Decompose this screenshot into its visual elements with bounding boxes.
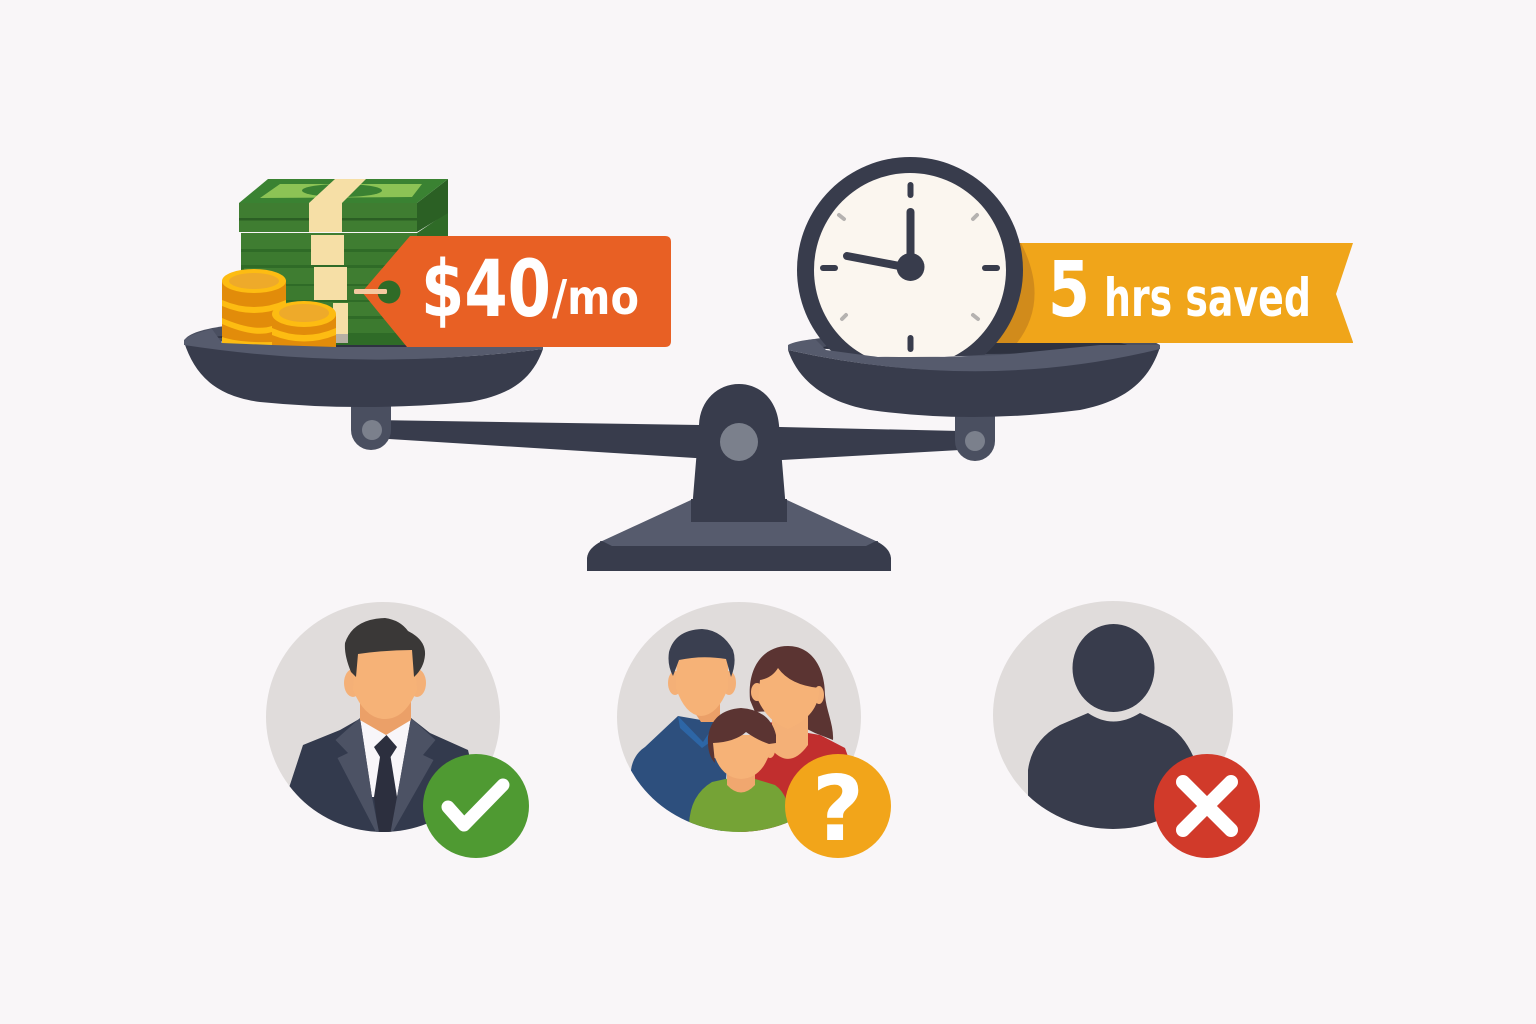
icon: gold coins [222, 269, 336, 347]
ribbon label [1048, 246, 1311, 335]
left coin stack [222, 269, 286, 345]
price label: /mo [552, 270, 639, 326]
silhouette head [1072, 624, 1154, 712]
badge: check [423, 754, 529, 858]
price tag [354, 236, 671, 347]
avatar circle [266, 602, 500, 832]
tag hole [378, 280, 400, 304]
icon: clock [797, 157, 1023, 357]
tag string [354, 289, 387, 294]
fulcrum base [587, 499, 891, 571]
minor ticks [839, 215, 978, 319]
paper band [309, 179, 366, 232]
badge: question mark [785, 754, 891, 862]
ears [344, 670, 356, 697]
fulcrum post [691, 384, 787, 522]
right pan back [788, 336, 1160, 358]
woman [741, 646, 848, 832]
clock ticks [820, 182, 1000, 352]
suit [290, 718, 470, 832]
ribbon: hours saved [994, 243, 1353, 343]
badge: cross [1154, 754, 1260, 858]
person group: family [617, 602, 861, 840]
person: silhouette [993, 601, 1233, 840]
right pan bowl [788, 339, 1160, 417]
shirt [360, 718, 411, 797]
face [356, 650, 414, 719]
left hanger [351, 404, 391, 450]
badge: question mark: ? [812, 757, 864, 862]
balance scale [351, 384, 995, 571]
ribbon label: 5 [1048, 246, 1090, 335]
tie [374, 735, 397, 832]
person: businessman [266, 602, 500, 840]
left pan bowl [184, 329, 543, 407]
neck [360, 702, 411, 735]
avatar circle [993, 601, 1233, 829]
avatar circle [617, 602, 861, 832]
price label: $40 [421, 245, 551, 335]
left pan back [184, 326, 543, 347]
man [630, 629, 736, 835]
right hanger [955, 415, 995, 461]
icon: stack of cash [239, 179, 448, 345]
ribbon label: hrs saved [1104, 268, 1311, 329]
hair [345, 618, 425, 677]
child [689, 708, 788, 832]
lower bills [241, 212, 448, 345]
ribbon shadow [994, 243, 1035, 343]
clock hands [847, 212, 910, 268]
beam [372, 420, 960, 460]
pivot [720, 423, 758, 461]
top bills [239, 203, 417, 232]
lapels [336, 718, 379, 832]
right coin stack [272, 301, 336, 347]
